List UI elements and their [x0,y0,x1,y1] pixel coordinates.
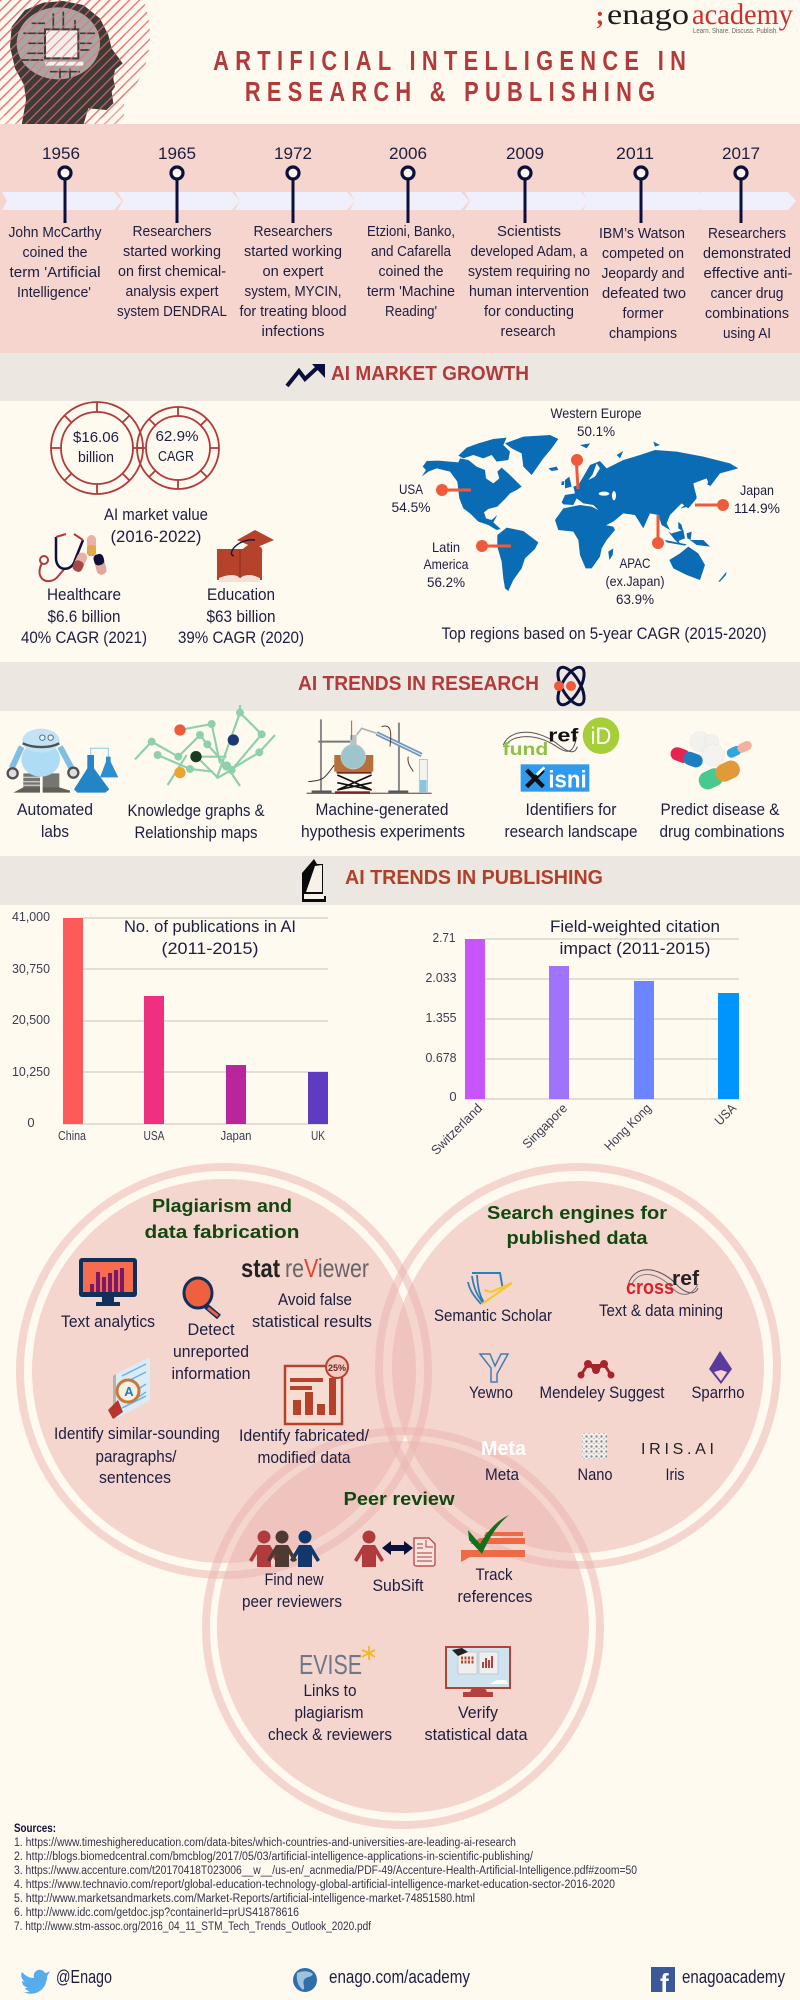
item: SubSift [354,1530,435,1595]
label: drug combinations [660,823,784,841]
arrow band [2,192,796,210]
pin: Latin America [424,539,511,590]
icon: monitor with book [446,1647,510,1697]
label: Text & data mining [599,1302,723,1320]
label: modified data [258,1449,351,1467]
title: ARTIFICIAL INTELLIGENCE IN [213,45,686,77]
event 2006: and Cafarella [371,243,452,260]
y axis: 0 [449,1089,457,1104]
y axis: 1.355 [426,1010,456,1025]
label: Relationship maps [134,824,258,842]
icon: book [302,859,326,902]
event 1965: on first chemical- [118,263,226,280]
event 2006: term 'Machine [367,283,455,300]
event 1965: system DENDRAL [117,303,227,320]
label: Track [476,1566,513,1584]
world map [422,435,738,591]
icon: report with badge: 25% [328,1363,346,1373]
panel: AI market growth heading [0,353,800,401]
event 2011: defeated two [602,285,686,302]
label: Automated [17,801,93,819]
icon: check and list [461,1515,525,1562]
chart title: impact (2011-2015) [560,940,710,958]
pin: Japan: 114.9% [734,500,780,516]
icon: document and magnifier: A [124,1384,134,1399]
panel: search engines for published data [434,1203,744,1484]
heading: Plagiarism and [152,1196,292,1216]
pin: APAC: 63.9% [616,591,654,607]
pin: Latin America: 56.2% [427,574,465,590]
sector: healthcare: 40% CAGR (2021) [21,629,147,647]
stat: market value: billion [78,449,114,466]
item: predict disease [660,732,784,841]
bar chart: citation impact [426,918,739,1158]
item: automated labs [8,729,118,841]
label: Mendeley Suggest [540,1384,665,1402]
logo: enago academy: ; [596,1,604,30]
sources: 5. http://www.marketsandmarkets.com/Market-Reports/artificial-intelligence-market-74851580.html [14,1893,475,1905]
label: Identify similar-sounding [54,1425,220,1443]
pin: Japan: Japan [740,482,774,498]
event 1972: infections [262,323,324,340]
x axis: Japan [220,1128,252,1143]
chart title [124,918,296,958]
y axis: 30,750 [12,961,50,976]
label [424,1704,528,1744]
stat: CAGR: CAGR [158,448,194,465]
pin: Latin America: America [424,556,469,572]
item: verify statistical data [424,1647,528,1744]
label: Meta [485,1466,520,1484]
icon: Yewno [480,1354,508,1382]
pin: APAC: (ex.Japan) [606,573,664,589]
label [54,1425,220,1487]
label: statistical data [424,1726,528,1744]
item: knowledge graphs [128,705,275,842]
event 2006 [367,144,455,320]
label [458,1566,532,1606]
panel: world map [392,405,780,643]
event 2006: Etzioni, Banko, [367,223,455,240]
event 1956: John McCarthy [8,224,102,241]
item: detect unreported information [172,1278,250,1383]
sector: education: $63 billion [206,608,276,626]
icon: book and graduation cap [217,530,274,582]
stat: market value: $16.06 [73,429,119,446]
icon: network graph [135,705,275,786]
caption: AI market value [104,506,208,546]
icon: lab apparatus [307,719,432,794]
event 1956: coined the [22,244,88,261]
event 2006: Reading' [385,303,437,320]
label [268,1682,392,1744]
event 2011: Jeopardy and [602,265,684,282]
label: Iris [666,1466,684,1484]
logo: Meta: Meta [481,1438,527,1460]
item: Yewno [469,1354,513,1402]
event 2017: cancer drug [710,285,784,302]
label: information [172,1365,250,1383]
chart title [550,918,720,958]
label: peer reviewers [242,1593,342,1611]
icon: person, arrow and document [354,1530,435,1567]
event 1965: analysis expert [126,283,219,300]
sources: 4. https://www.technavio.com/report/global-education-technology-global-artificial-intelligence-market-education-sector-2016-2020 [14,1879,615,1891]
item: track references [458,1515,532,1606]
event 2006: 2006 [389,144,427,163]
event 2011: former [622,305,664,322]
item: Iris [641,1441,714,1484]
sector: education: 39% CAGR (2020) [178,629,304,647]
chart title: Field-weighted citation [550,918,720,936]
event 2017: Researchers [708,225,786,242]
heading: Peer review [344,1489,456,1509]
twitter: @Enago [56,1967,112,1987]
heading: data fabrication [144,1222,300,1242]
heading: AI trends in publishing: AI TRENDS IN PUBLISHING [345,867,603,889]
item: fabricated data [239,1356,369,1467]
event 1956: term 'Artificial [10,264,100,281]
icon: head with circuit brain [0,0,150,130]
icon: rising arrow [287,364,325,386]
event 1972: started working [244,243,342,260]
logo: crossref: cross [626,1277,674,1299]
label: check & reviewers [268,1726,392,1744]
panel: AI trends in research heading [0,662,800,711]
icon: Mendeley [578,1360,614,1378]
website [293,1967,470,1992]
icon: Sparrho [709,1351,732,1384]
sources: 3. https://www.accenture.com/t20170418T023006__w__/us-en/_acnmedia/PDF-49/Accenture-Health-Artificial-Intelligence.pdf#zoom=50 [14,1865,637,1877]
event 2017: using AI [723,325,771,342]
logo: stat reviewer [241,1253,369,1283]
bar chart: publications [12,909,328,1143]
logo: crossref [626,1268,699,1299]
event 2009 [468,144,590,340]
panel: market value [21,402,304,647]
y axis [426,930,457,1104]
x axis: USA [144,1128,165,1143]
item: stat reviewer [241,1253,372,1331]
logo: stat reviewer: stat [241,1253,280,1283]
stat: CAGR [156,428,198,465]
stat: market value [73,429,119,466]
logo: IRIS.AI: IRIS.AI [641,1441,714,1458]
icon: document and magnifier [108,1357,150,1419]
panel: AI trends in publishing heading [0,856,800,905]
event 2009: developed Adam, a [470,243,588,260]
event 2011: competed on [602,245,684,262]
pin: Latin America: Latin [432,539,460,555]
event 2017 [703,144,792,342]
logo: enago academy [596,0,793,35]
item: similar-sounding paragraphs [54,1357,220,1487]
panel: research trends [8,705,785,842]
label [252,1291,372,1331]
event 1972: for treating blood [240,303,346,320]
item: hypothesis experiments [301,719,465,841]
y axis [12,909,50,1130]
event 1965: started working [123,243,221,260]
x axis [58,1128,325,1143]
item: Meta [481,1438,527,1484]
item: Mendeley Suggest [540,1360,665,1402]
map caption: Top regions based on 5-year CAGR (2015-2020) [442,625,766,643]
facebook: f [660,1968,669,1998]
icon: Nano [582,1433,607,1459]
y axis: 2.033 [426,970,456,985]
y axis: 2.71 [432,930,456,945]
event 1972: 1972 [274,144,312,163]
event 2011: champions [609,325,677,342]
pin: Western Europe: Western Europe [550,405,642,421]
y axis: 41,000 [12,909,50,924]
logo: enago academy: Learn. Share. Discuss. Publish. [693,26,778,35]
event 1972: system, MYCIN, [244,283,342,300]
icon: magnifier [184,1278,219,1317]
logo: crossref: ref [672,1268,699,1290]
label: Semantic Scholar [434,1307,552,1325]
caption: AI market value: (2016-2022) [110,528,202,546]
label: Yewno [469,1384,513,1402]
x axis: Hong Kong [601,1101,654,1154]
event 2011: 2011 [616,144,654,163]
website: enago.com/academy [329,1967,470,1987]
event 2011: IBM’s Watson [599,225,685,242]
pin: Western Europe: 50.1% [577,423,615,439]
sector: healthcare [21,586,147,647]
pin: APAC: APAC [620,555,650,571]
label [301,801,465,841]
logos: fundref, iD, isni: iD [591,723,611,750]
y axis: 20,500 [12,1012,50,1027]
market value rings [51,402,219,494]
event 2017: effective anti- [704,265,792,282]
event 2017: demonstrated [703,245,791,262]
icon: Semantic Scholar [468,1273,512,1304]
label: statistical results [252,1313,372,1331]
heading: published data [506,1228,649,1248]
event 1965: 1965 [158,144,196,163]
label: unreported [173,1343,249,1361]
sector: healthcare: Healthcare [47,586,121,604]
bars [465,939,739,1099]
icon: atom [553,663,589,709]
logos: fundref, iD, isni: ref [548,725,579,746]
y axis: 10,250 [12,1064,50,1079]
label [242,1571,342,1611]
x axis: China [58,1128,87,1143]
label: sentences [99,1469,171,1487]
footer [21,1967,785,1998]
label: Identify fabricated/ [239,1427,369,1445]
event 2009: 2009 [506,144,544,163]
sources: 7. http://www.stm-assoc.org/2016_04_11_STM_Tech_Trends_Outlook_2020.pdf [14,1921,372,1933]
panel: timeline [0,124,800,353]
item: text analytics [61,1258,155,1331]
event 2009: system requiring no [468,263,590,280]
event 2011 [599,144,686,342]
heading [487,1203,667,1248]
icon: stethoscope and pills [40,534,108,581]
item: identifiers [503,717,638,841]
venn diagram circles [20,1167,777,1825]
label: plagiarism [294,1704,364,1722]
pin: APAC [606,515,664,607]
label: Text analytics [61,1313,155,1331]
sources: Sources: [14,1823,56,1835]
label [504,801,638,841]
label [239,1427,369,1467]
item: find new peer reviewers [242,1530,342,1611]
chart title: (2011-2015) [162,940,258,958]
sources: 2. http://blogs.biomedcentral.com/bmcblog/2017/05/03/artificial-intelligence-applications-in-scientific-publishing/ [14,1851,534,1863]
sector: education: Education [207,586,275,604]
label [128,802,264,842]
event 2009: research [500,323,556,340]
heading: AI trends in research: AI TRENDS IN RESEARCH [298,673,539,695]
label: Verify [458,1704,499,1722]
sector: education [178,586,304,647]
event 1965: Researchers [132,223,212,240]
logos: fundref, iD, isni: isni [548,766,587,793]
label: Links to [304,1682,356,1700]
timeline pins [59,167,747,223]
chart title: No. of publications in AI [124,918,296,936]
x axis: USA [712,1100,739,1128]
logo: stat reviewer: reViewer [285,1253,369,1283]
x axis [428,1100,739,1158]
pin: USA: USA [399,481,424,497]
pin: USA: 54.5% [392,499,430,515]
heading: Search engines for [487,1203,667,1223]
pin: USA [392,481,471,515]
label [17,801,93,841]
twitter [21,1967,112,1994]
sources [14,1823,637,1933]
pin: Japan [695,482,780,516]
y axis: 0.678 [426,1050,456,1065]
event 1972 [240,144,346,340]
x axis: UK [311,1128,325,1143]
label: Sparrho [692,1384,744,1402]
event 1956 [8,144,102,301]
logo: EVISE: EVISE [299,1649,362,1680]
label: Machine-generated [316,801,448,819]
event 1965 [117,144,227,320]
label [660,801,784,841]
event 2009: Scientists [497,223,561,240]
label: Find new [264,1571,324,1589]
heading: AI market growth: AI MARKET GROWTH [331,363,529,385]
event 1972: on expert [262,263,324,280]
y axis: 0 [27,1115,35,1130]
label: paragraphs/ [96,1448,177,1466]
logos: fundref, iD, isni: fund [503,739,548,759]
label: Avoid false [278,1291,352,1309]
label: SubSift [372,1577,424,1595]
sector: healthcare: $6.6 billion [48,608,120,626]
x axis: Switzerland [428,1101,485,1158]
sources: 6. http://www.idc.com/getdoc.jsp?containerId=prUS41878616 [14,1907,299,1919]
label: Nano [578,1466,612,1484]
icon: robot and flasks [8,729,118,793]
panel: plagiarism and data fabrication [54,1196,372,1487]
label: Knowledge graphs & [128,802,264,820]
event 1972: Researchers [254,223,332,240]
label: Identifiers for [526,801,617,819]
event 2017: combinations [705,305,789,322]
item: Nano [578,1433,612,1484]
item: Semantic Scholar [434,1273,552,1325]
stat: CAGR: 62.9% [156,428,198,445]
panel: peer review [242,1489,532,1744]
label: Predict disease & [660,801,780,819]
event 2009: human intervention [469,283,589,300]
label [172,1321,250,1383]
event 2006: coined the [378,263,444,280]
label: Detect [188,1321,235,1339]
title: RESEARCH & PUBLISHING [245,76,655,108]
event 1956: Intelligence' [17,284,91,301]
facebook [651,1967,785,1998]
icon: three people [249,1530,320,1567]
item: Crossref [599,1268,723,1320]
icon: monitor with chart [79,1258,137,1306]
label: hypothesis experiments [301,823,465,841]
header [0,0,793,130]
event 2017: 2017 [722,144,760,163]
item: EVISE [268,1646,392,1744]
pin: Western Europe [550,405,642,489]
icon: pills [669,732,753,792]
heading [144,1196,300,1242]
label: research landscape [504,823,638,841]
bars [63,918,328,1124]
caption: AI market value: AI market value [104,506,208,524]
item: Sparrho [692,1351,744,1402]
label: references [458,1588,532,1606]
sources: 1. https://www.timeshighereducation.com/data-bites/which-countries-and-universities-are-leading-ai-research [14,1837,516,1849]
title [213,45,686,108]
logos: fundref, iD, isni [503,717,619,793]
event 1956: 1956 [42,144,80,163]
event 2009: for conducting [484,303,574,320]
label: labs [41,823,69,841]
x axis: Singapore [519,1101,570,1151]
